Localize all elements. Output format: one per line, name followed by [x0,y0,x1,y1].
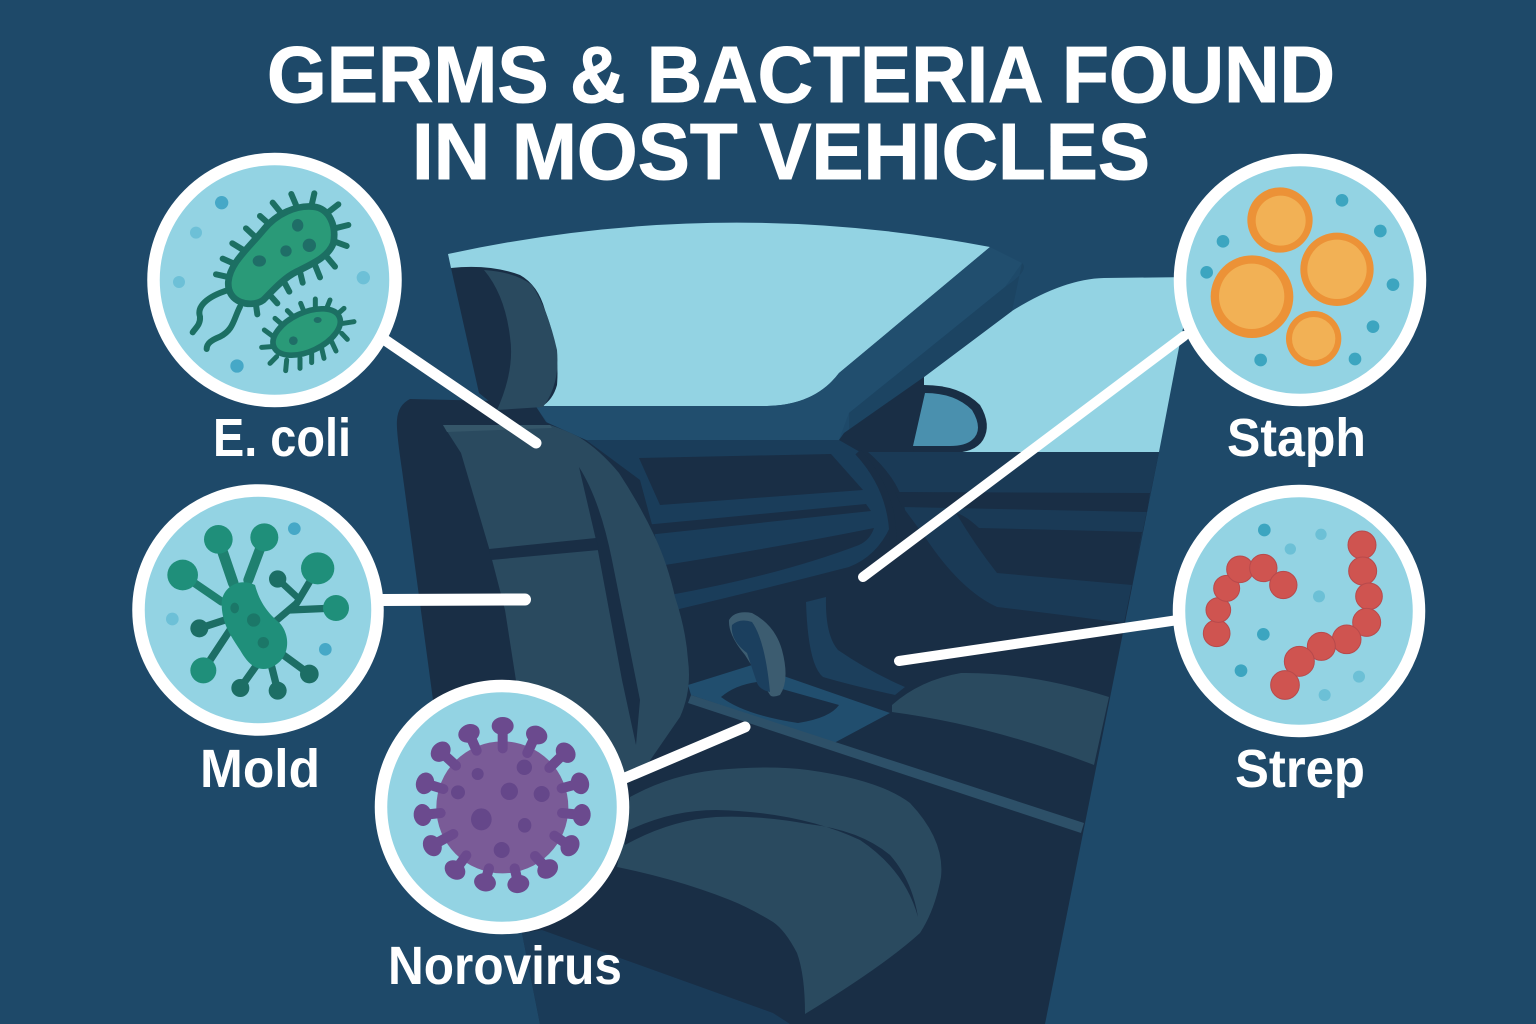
E. coli magnifier [154,159,396,401]
circle: E. coli [154,159,396,401]
icon: Norovirus [413,717,592,895]
circle: Mold [138,490,378,730]
side mirror [913,385,987,453]
steering column arc [858,452,893,540]
side window [924,277,1195,452]
title: IN MOST VEHICLES [412,107,1150,196]
headrest neck [490,405,548,425]
windshield [448,223,990,406]
seat upper highlight [443,425,552,432]
icon: E. coli bacteria [173,193,370,373]
Mold magnifier [138,490,378,730]
windshield pillar shadow [849,263,1024,440]
Strep magnifier [1179,491,1419,731]
right seat [892,673,1109,765]
dashboard vent upper [639,454,863,505]
seat back [443,425,689,775]
gear console [688,665,890,743]
lower floor area [522,930,790,1024]
door panel [868,452,1159,623]
icon: Mold [166,522,349,700]
seat back horizontal groove [489,538,599,560]
door pocket [956,513,1142,585]
label: E. coli: E. coli [213,408,351,468]
front seat cushion [617,768,941,1014]
label: Norovirus: Norovirus [388,936,622,996]
circle: Staph [1180,160,1420,400]
title: GERMS & BACTERIA FOUND [267,30,1335,119]
label: Staph: Staph [1227,408,1366,468]
A-pillar [535,247,1022,440]
gear lever [729,612,786,696]
label: Mold: Mold [200,739,320,799]
leader lines [378,336,1184,778]
headrest [451,267,558,410]
seat back vertical groove [579,467,640,745]
label: Strep: Strep [1235,739,1365,799]
dashboard trim strip [644,504,871,535]
interior dark base [397,377,1159,1024]
dashboard vent lower [665,528,874,595]
title [267,30,1335,196]
console side strip [688,695,1084,833]
gear boot [721,682,839,723]
dashboard [586,440,893,610]
center console trim [806,597,905,695]
icon: Staph [1200,187,1399,366]
icon: Strep [1203,524,1382,701]
door trim strip [895,492,1150,512]
circle: Norovirus [381,686,623,928]
Norovirus magnifier [381,686,623,928]
cushion groove [625,810,918,917]
circle: Strep [1179,491,1419,731]
car interior illustration [397,223,1195,1024]
Staph magnifier [1180,160,1420,400]
